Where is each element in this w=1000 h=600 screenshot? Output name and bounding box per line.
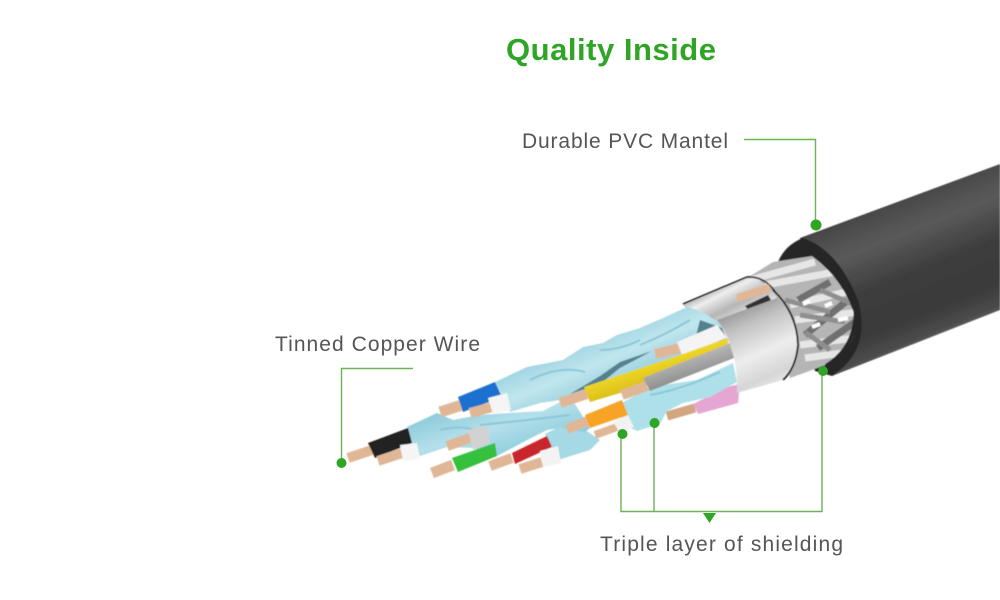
white wire <box>655 325 727 355</box>
orange wire <box>567 400 628 429</box>
lower right teal foil <box>620 363 737 431</box>
callout: Triple layer of shielding <box>600 366 843 556</box>
exposed copper conductor, upper <box>737 288 770 298</box>
cable illustration <box>348 164 1000 473</box>
yellow wire <box>560 338 728 403</box>
callout: Triple layer of shielding: Triple layer of shielding <box>600 533 843 556</box>
upper metal foil <box>683 277 790 345</box>
blue and white wire pair <box>440 382 511 414</box>
callout: Durable PVC Mantel <box>522 130 822 230</box>
green and grey wire pair <box>432 425 497 473</box>
metal braid shield <box>747 256 858 378</box>
black and white wire pair <box>348 428 420 461</box>
PVC jacket <box>778 164 1000 376</box>
grey wire <box>622 343 734 395</box>
small white wire <box>595 415 634 435</box>
middle teal foil <box>407 402 590 457</box>
dark gap behind wires <box>570 320 728 394</box>
callout: Tinned Copper Wire <box>275 333 480 468</box>
metal sleeve <box>717 290 798 393</box>
upper teal foil <box>495 307 722 412</box>
title: Quality Inside <box>506 32 716 67</box>
callout: Durable PVC Mantel: Durable PVC Mantel <box>522 130 728 153</box>
red and white wire pair <box>490 436 561 469</box>
red pair teal foil <box>545 428 600 460</box>
callout: Tinned Copper Wire: Tinned Copper Wire <box>275 333 480 356</box>
pink wire <box>667 384 740 416</box>
foil fold details <box>440 320 720 430</box>
